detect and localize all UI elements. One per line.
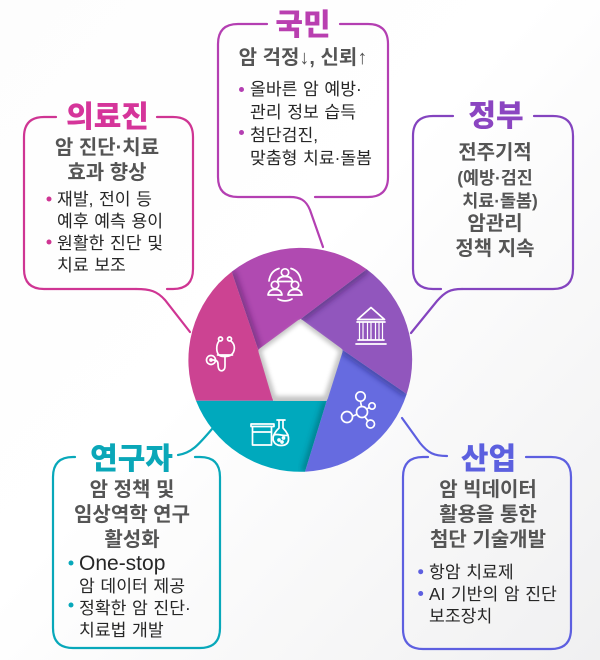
bullet list: 치료 보조 [57, 255, 126, 275]
panel: 국민 [218, 9, 388, 197]
heading: 산업 [461, 443, 516, 476]
subheading: 효과 향상 [67, 161, 147, 184]
bullet list: 정확한 암 진단· [79, 598, 191, 618]
subheading [455, 141, 538, 260]
connector: 산업 to wheel [402, 418, 447, 456]
bullet list: 관리 정보 습득 [250, 102, 356, 122]
subheading: 암관리 [467, 212, 523, 235]
connector: 의료진 to wheel [136, 289, 190, 332]
bullet list: 암 데이터 제공 [79, 576, 185, 596]
icon: stethoscope [206, 337, 234, 371]
bullet list: 첨단검진, [250, 125, 318, 145]
subheading: 암 빅데이터 [439, 478, 537, 501]
subheading: 암 진단·치료 [55, 136, 159, 159]
subheading [74, 478, 190, 551]
bullet list: AI 기반의 암 진단 [429, 584, 557, 604]
subheading: 암 정책 및 [90, 478, 174, 501]
center pentagon [262, 324, 338, 397]
connector: 연구자 to wheel [178, 429, 212, 455]
panel outline [53, 457, 220, 648]
bullet list: 맞춤형 치료·돌봄 [250, 148, 372, 168]
subheading: 치료·돌봄) [462, 191, 538, 211]
connector: 국민 to wheel [290, 197, 323, 247]
subheading: 활성화 [104, 528, 160, 551]
panel: 산업 [403, 443, 571, 649]
bullet list: 원활한 진단 및 [57, 233, 163, 253]
bullet list: 재발, 전이 등 [57, 189, 152, 209]
panel outline [403, 457, 571, 649]
segment: 정부 violet [301, 269, 412, 394]
subheading: 첨단 기술개발 [430, 528, 546, 551]
subheading: 정책 지속 [455, 237, 535, 260]
connector: 정부 to wheel [411, 289, 462, 333]
bullet list: 보조장치 [429, 606, 492, 626]
subheading [55, 136, 159, 184]
panel outline [218, 24, 388, 197]
heading: 의료진 [66, 101, 149, 134]
bullet list: 항암 치료제 [429, 562, 514, 582]
panel: 의료진 [24, 101, 193, 289]
bullet list [46, 189, 163, 275]
bullet list: 예후 예측 용이 [57, 211, 163, 231]
icon: molecule [342, 392, 375, 428]
icon: government building [356, 308, 386, 344]
bullet list: 치료법 개발 [79, 620, 164, 640]
pentagon wheel [188, 248, 412, 472]
segment: 의료진 pink [188, 272, 273, 401]
panel outline [24, 117, 193, 289]
subheading: 암 걱정↓, 신뢰↑ [239, 46, 367, 69]
bullet list: 올바른 암 예방· [250, 79, 362, 99]
heading: 연구자 [90, 443, 173, 476]
bullet list: One-stop [79, 552, 165, 575]
subheading: 임상역학 연구 [74, 503, 190, 526]
segment: 연구자 teal [196, 401, 327, 472]
bullet list [239, 79, 372, 168]
panel outline [413, 116, 573, 289]
subheading [430, 478, 546, 551]
subheading: 전주기적 [458, 141, 532, 164]
icon: lab jar and flask [251, 420, 289, 446]
heading: 국민 [275, 9, 331, 42]
bullet list [418, 562, 557, 626]
panel: 연구자 [53, 443, 220, 648]
segment: 산업 blue [305, 350, 407, 472]
heading: 정부 [468, 100, 524, 133]
panel: 정부 [413, 100, 573, 289]
subheading: (예방·검진 [457, 168, 533, 188]
subheading: 활용을 통한 [439, 503, 537, 526]
icon: people [268, 268, 302, 301]
segment: 국민 purple [232, 248, 367, 350]
bullet list [68, 552, 191, 640]
